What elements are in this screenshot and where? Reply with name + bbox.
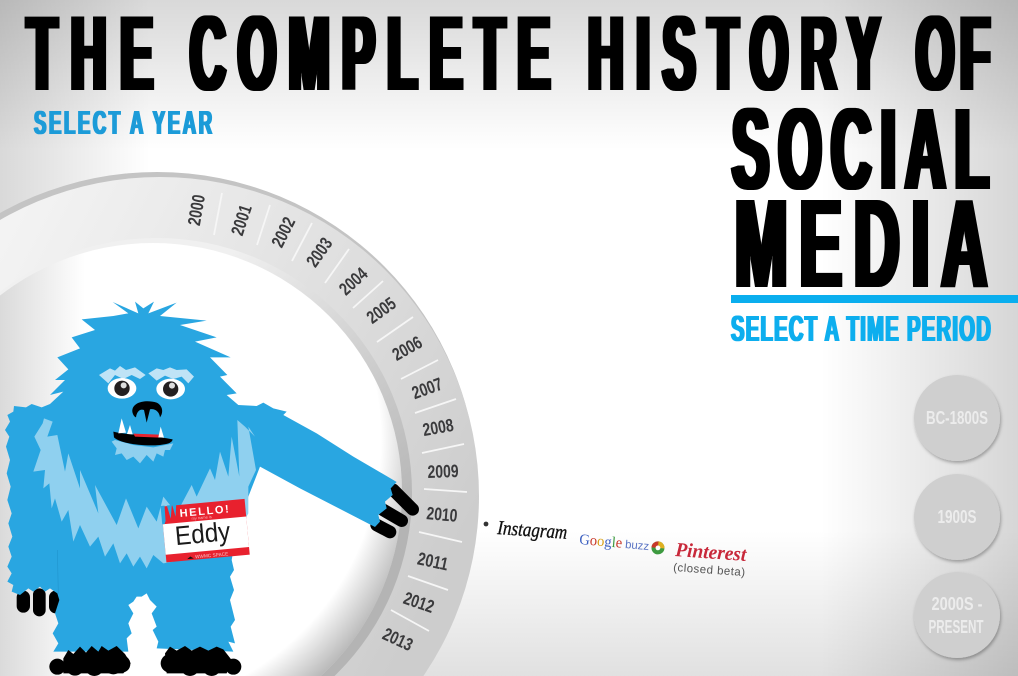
- icon: buzz bubble: [651, 541, 665, 555]
- title: social: SOCIAL: [732, 86, 989, 214]
- logo: Google buzz: [579, 532, 665, 555]
- button: 1900s: [914, 474, 1000, 560]
- year tick marks: [214, 193, 467, 631]
- title: media: MEDIA: [735, 174, 987, 315]
- logo: Google buzz: Google: [579, 532, 623, 552]
- button: 2000s to present: PRESENT: [928, 617, 984, 637]
- year labels 2000 to 2013: 2005: [363, 293, 400, 328]
- button: 1900s: 1900S: [938, 507, 976, 527]
- blue fur body: [5, 302, 397, 652]
- nose: [132, 401, 162, 423]
- eyes: [108, 378, 136, 399]
- heading: select a year: SELECT A YEAR: [34, 104, 212, 141]
- feet: [49, 646, 241, 676]
- year labels 2000 to 2013: 2000: [184, 193, 209, 227]
- button: 2000s to present: 2000S -: [932, 594, 983, 614]
- year labels 2000 to 2013: 2001: [227, 202, 256, 238]
- year labels 2000 to 2013: 2010: [426, 503, 458, 526]
- title: the complete history of: [27, 0, 990, 113]
- left arm seam: [56, 550, 59, 593]
- year labels 2000 to 2013: 2013: [380, 624, 416, 655]
- 2010 social network logos: [484, 517, 748, 579]
- time period buttons: [914, 375, 1000, 658]
- logo: Google buzz: buzz: [625, 539, 650, 553]
- name tag: HELLO!: [179, 503, 229, 520]
- name tag: Eddy: [174, 516, 232, 551]
- year wheel dial: [0, 172, 479, 676]
- right hand claws: [377, 490, 413, 532]
- mouth: [113, 432, 173, 445]
- heading: select a time period: SELECT A TIME PERIOD: [731, 310, 991, 350]
- year labels 2000 to 2013: 2004: [335, 264, 372, 299]
- name tag: my name is: [191, 514, 212, 521]
- left hand claws: [17, 588, 62, 616]
- logo: Instagram: Instagram: [496, 517, 568, 544]
- year labels 2000 to 2013: 2002: [267, 214, 299, 251]
- year labels 2000 to 2013: 2003: [302, 234, 336, 271]
- blue divider bar: [731, 295, 1018, 303]
- beard: [112, 440, 173, 463]
- face: [99, 366, 194, 463]
- year labels 2000 to 2013: 2007: [409, 374, 445, 403]
- button: 2000s to present: [914, 572, 1000, 658]
- year labels 2000 to 2013: 2011: [416, 548, 450, 574]
- button: BC-1800s: [914, 375, 1000, 461]
- mascot: Eddy the blue yeti: [5, 302, 413, 676]
- logo: Pinterest: Pinterest: [674, 539, 748, 566]
- year labels 2000 to 2013: 2009: [427, 461, 459, 482]
- eyebrows: [99, 366, 194, 383]
- button: BC-1800s: BC-1800S: [926, 408, 988, 428]
- note: closed beta: (closed beta): [673, 562, 746, 579]
- year labels 2000 to 2013: 2012: [401, 588, 437, 617]
- bullet: [484, 522, 488, 526]
- year labels 2000 to 2013: [184, 193, 459, 655]
- year labels 2000 to 2013: 2006: [389, 332, 426, 365]
- name tag: [161, 498, 250, 562]
- teeth: [118, 418, 164, 438]
- light belly fur: [33, 418, 256, 568]
- year labels 2000 to 2013: 2008: [421, 415, 455, 440]
- name tag: WWMC SPACE: [195, 551, 228, 559]
